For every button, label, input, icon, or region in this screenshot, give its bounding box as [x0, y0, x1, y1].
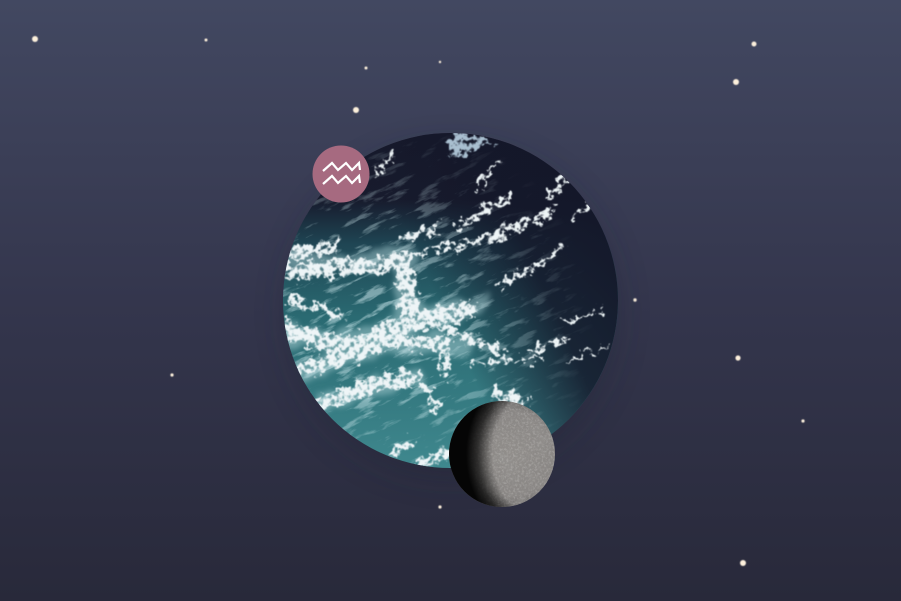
- Aquarius glyph: [323, 163, 360, 184]
- foam texture: [283, 138, 576, 468]
- ocean disc: [283, 133, 618, 468]
- shadow behind ocean disc: [287, 147, 617, 477]
- moon night side: [449, 401, 510, 507]
- moon blotches: [475, 402, 525, 506]
- foam streaks: [287, 133, 610, 465]
- planet: Mercury: [449, 401, 555, 507]
- stars: [32, 36, 805, 566]
- foam haze: [285, 258, 480, 405]
- moon surface texture: [482, 401, 555, 507]
- icon: Aquarius badge: [312, 146, 370, 202]
